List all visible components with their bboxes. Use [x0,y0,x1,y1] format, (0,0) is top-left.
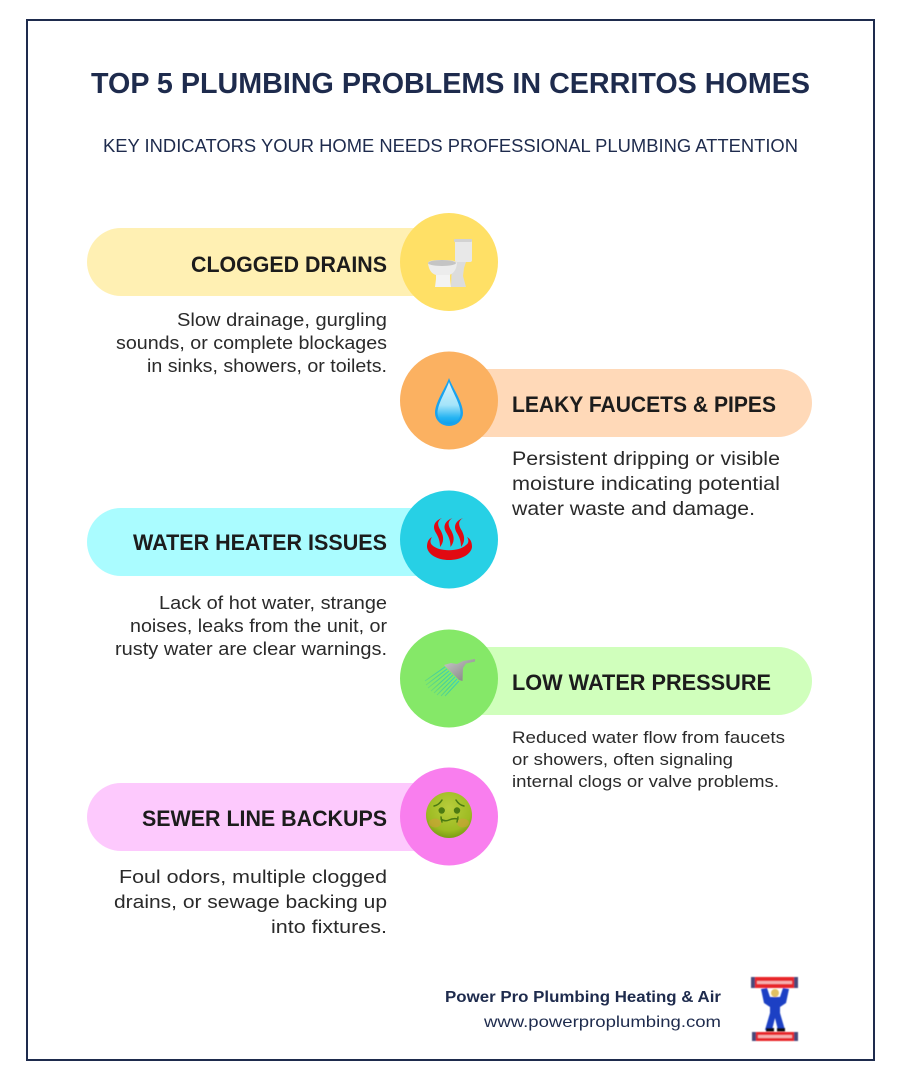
title: TOP 5 PLUMBING PROBLEMS IN CERRITOS HOMES [91,68,810,100]
icon circle: nauseated face [400,768,498,866]
heading: sewer line backups: SEWER LINE BACKUPS [142,806,387,831]
panel: leaky faucets [400,352,812,520]
description: low water pressure: or showers, often signaling [512,751,733,769]
pill: sewer line backups [87,783,450,851]
icon circle: toilet [400,213,498,311]
footer company name: Power Pro Plumbing Heating & Air [445,989,721,1006]
icon circle: water drop [400,352,498,450]
pill: water heater [87,508,450,576]
panel: sewer line backups [87,768,498,937]
description: low water pressure [512,729,785,791]
description: sewer line backups: Foul odors, multiple clogged [119,866,387,887]
description: water heater [115,592,387,659]
description: sewer line backups: into fixtures. [271,916,387,937]
icon circle: hot springs [400,490,498,588]
description: low water pressure: Reduced water flow from faucets [512,729,785,747]
description: leaky faucets [511,448,780,520]
heading: leaky faucets: LEAKY FAUCETS & PIPES [512,392,776,417]
panel: clogged drains [87,213,498,376]
description: low water pressure: internal clogs or valve problems. [512,773,779,791]
logo: plumber lifting pipe [751,977,798,1041]
panel: water heater [87,490,498,659]
description: leaky faucets: water waste and damage. [511,498,755,520]
pill: leaky faucets [449,369,812,437]
description: clogged drains: in sinks, showers, or toilets. [147,355,387,376]
panel: low water pressure [400,630,812,791]
heading: low water pressure: LOW WATER PRESSURE [512,670,771,695]
description: sewer line backups [114,866,387,937]
description: leaky faucets: Persistent dripping or visible [512,448,780,470]
description: sewer line backups: drains, or sewage backing up [114,891,387,912]
description: clogged drains: Slow drainage, gurgling [177,309,387,330]
description: water heater: Lack of hot water, strange [159,592,387,613]
icon circle: shower head [400,630,498,728]
pill: low water pressure [449,647,812,715]
description: water heater: noises, leaks from the unit, or [130,615,387,636]
description: water heater: rusty water are clear warnings. [115,638,387,659]
subtitle: KEY INDICATORS YOUR HOME NEEDS PROFESSIONAL PLUMBING ATTENTION [103,136,798,156]
heading: clogged drains: CLOGGED DRAINS [191,252,387,277]
description: clogged drains: sounds, or complete blockages [116,332,387,353]
pill: clogged drains [87,228,450,296]
description: leaky faucets: moisture indicating potential [512,473,780,495]
description: clogged drains [116,309,387,376]
heading: water heater: WATER HEATER ISSUES [133,530,387,555]
footer website: www.powerproplumbing.com [483,1014,721,1031]
